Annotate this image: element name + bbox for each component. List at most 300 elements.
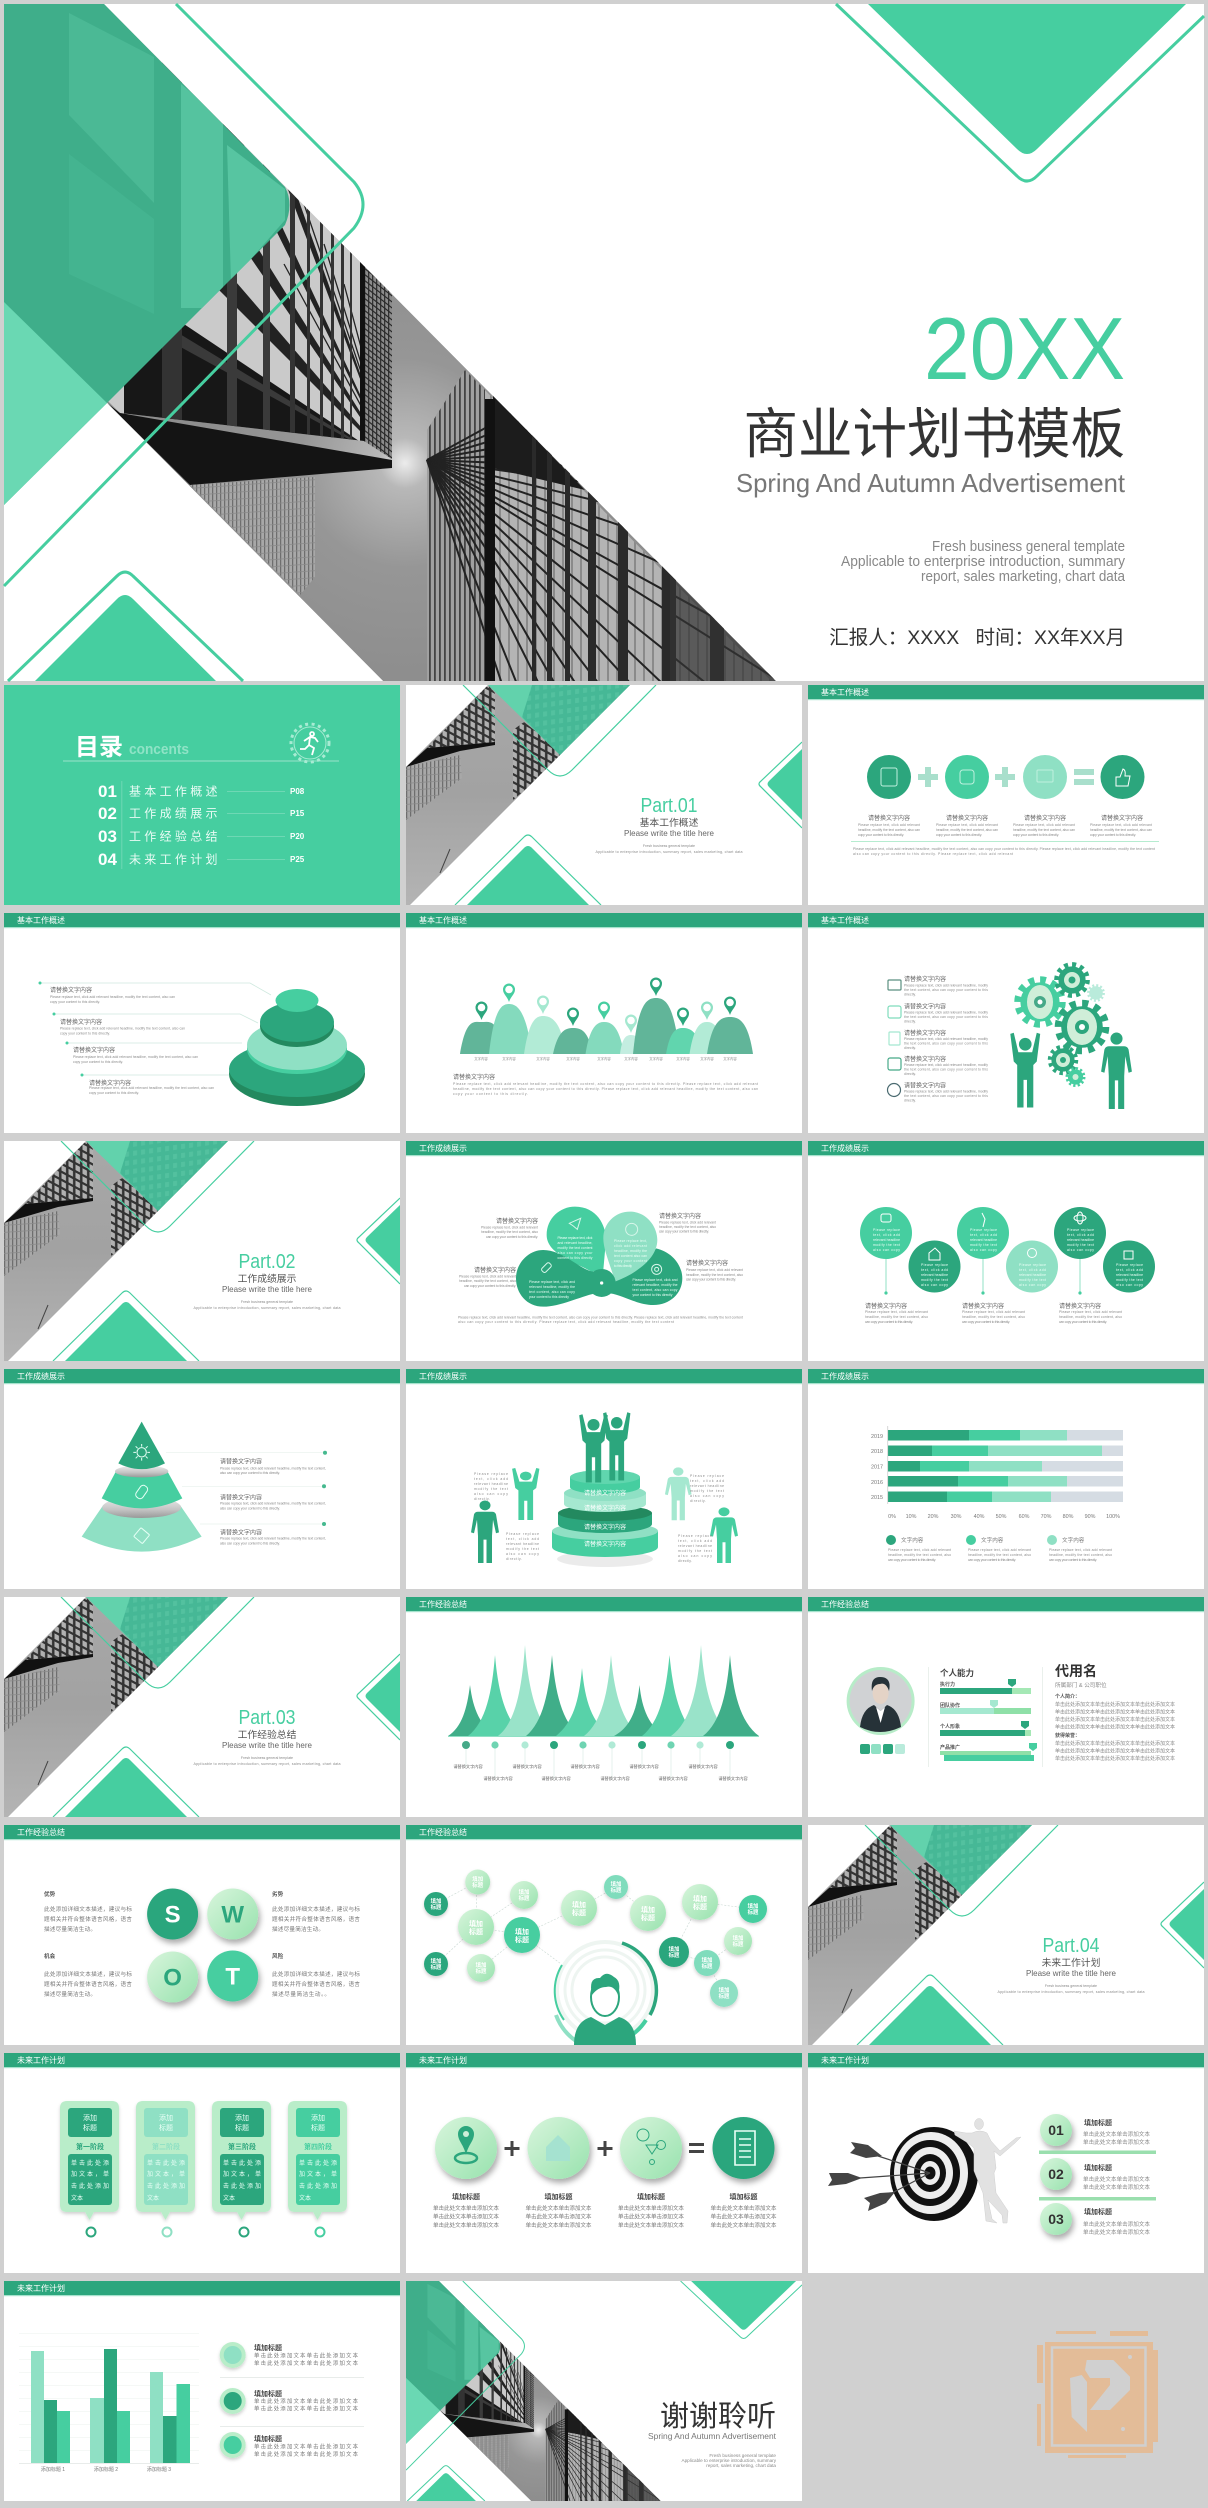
contents list: P15 xyxy=(290,809,305,818)
legend xyxy=(886,1535,1112,1562)
cover artwork: photo, green shapes and outlines xyxy=(4,4,1204,694)
dashed connectors xyxy=(444,1888,740,1980)
card 1: 击此处添加 xyxy=(71,2182,109,2190)
contents list: 未来工作计划 xyxy=(129,852,221,866)
card 2: 单击此处添 xyxy=(147,2159,185,2167)
section text: Applicable to enterprise introduction, summary report, sales marketing, chart data xyxy=(998,1990,1144,1994)
layered cone chart xyxy=(229,989,365,1106)
balloon text: also can copy xyxy=(921,1283,948,1287)
card 3: 击此处添加 xyxy=(223,2182,261,2190)
slide: overview circles equation: headline, modify the text content, also can xyxy=(936,828,998,832)
column text: 单击此处文本单击添加文本 xyxy=(618,2221,684,2229)
paragraph: Please replace text, click add relevant headline, modify the text content, also can copy your content to this directly. Please replace text, click add relevant xyxy=(453,1082,758,1086)
text items: Please replace text, click add relevant headline, modify the text content, also can xyxy=(50,995,175,999)
side text: relevant headline xyxy=(474,1482,508,1486)
year labels: 2016 xyxy=(871,1480,883,1486)
slide: section Part.02 xyxy=(4,1141,400,1361)
axis labels: 文字内容 xyxy=(624,1056,638,1061)
balloon text: Please replace xyxy=(970,1228,997,1232)
text items: Please replace text, click add relevant headline, modify the text content, also can xyxy=(60,1026,185,1030)
column text: 单击此处文本单击添加文本 xyxy=(433,2221,499,2229)
header bar xyxy=(406,2053,802,2068)
card 3: 单击此处添 xyxy=(223,2159,261,2167)
bubble labels: 填加 xyxy=(472,1875,483,1883)
section text: Please write the title here xyxy=(1026,1969,1116,1978)
side text: text, click add xyxy=(474,1477,508,1481)
podium labels: 请替换文字内容 xyxy=(584,1489,626,1497)
balloon text: text, click add xyxy=(970,1233,997,1237)
text items: Please replace text, click add relevant headline, modify the text content, xyxy=(220,1502,326,1506)
column text: 单击此处文本单击添加文本 xyxy=(433,2204,499,2212)
legend text: 单击此处添加文本单击此处添加文本 xyxy=(254,2442,359,2450)
bubble labels: 填加 xyxy=(748,1902,758,1910)
balloon circles xyxy=(860,1207,1155,1292)
petal text: also can copy your xyxy=(558,1251,593,1255)
axis labels: 文字内容 xyxy=(723,1056,737,1061)
SWOT text: weaknesses xyxy=(272,1890,360,1933)
paragraph: 请替换文字内容 xyxy=(453,1073,495,1081)
skill bars: 团队协作 xyxy=(940,1702,960,1709)
section text: Fresh business general template xyxy=(241,1300,293,1304)
four text columns xyxy=(868,814,1143,822)
side text: text, click add xyxy=(506,1537,539,1541)
header bar xyxy=(406,913,802,928)
header bar: 工作成绩展示 xyxy=(17,1371,65,1381)
slide: overview circles equation: copy your content to this directly. xyxy=(858,833,904,837)
header bar: 未来工作计划 xyxy=(17,2055,65,2065)
header bar xyxy=(4,913,400,928)
circles xyxy=(435,2117,774,2179)
social icons xyxy=(860,1744,905,1754)
side text: modify the text xyxy=(678,1549,712,1553)
side text: modify the text xyxy=(690,1489,724,1493)
mountain shapes xyxy=(460,998,753,1054)
lower text columns: 请替换文字内容 xyxy=(962,1302,1004,1310)
outer labels: 请替换文字内容 xyxy=(686,1259,728,1267)
section text: Part.01 xyxy=(640,795,698,817)
list text: directly. xyxy=(904,1020,916,1024)
section text xyxy=(596,795,742,854)
side text: Please replace xyxy=(506,1532,539,1536)
list text: directly. xyxy=(904,992,916,996)
petal text: your content to this directly xyxy=(632,1293,673,1297)
leader lines xyxy=(40,983,271,1075)
slide: icon equation with shadows xyxy=(406,2053,802,2273)
card 2: 添加 xyxy=(159,2113,173,2122)
column text xyxy=(433,2192,777,2229)
bubble labels: 标题 xyxy=(748,1908,759,1916)
column text: 单击此处文本单击添加文本 xyxy=(526,2212,592,2220)
bubble labels: 填加 xyxy=(719,1986,729,1994)
petal text: text content, also can copy xyxy=(632,1288,678,1292)
SWOT text: opportunities: 题相关并符合整体语言风格，语言 xyxy=(44,1980,132,1988)
card 4: 标题 xyxy=(311,2123,325,2132)
bar labels: 添加标题 2 xyxy=(94,2466,118,2473)
header bar xyxy=(406,1597,802,1612)
slide: petal diagram xyxy=(406,1141,802,1361)
SWOT text: weaknesses: 劣势 xyxy=(272,1890,284,1898)
skill bars: 执行力 xyxy=(940,1681,955,1688)
SWOT circles xyxy=(147,1888,258,2002)
header bar: 未来工作计划 xyxy=(821,2055,869,2065)
legend text xyxy=(220,2343,364,2458)
card 4: 第四阶段 xyxy=(304,2142,332,2151)
card 3: 添加 xyxy=(235,2113,249,2122)
percent axis: 10% xyxy=(906,1514,917,1520)
section text: Please write the title here xyxy=(624,829,714,838)
bubble labels: 填加 xyxy=(733,1934,743,1942)
header bar: 工作成绩展示 xyxy=(419,1371,467,1381)
goal text and bars: 填加标题 xyxy=(1084,2207,1112,2216)
slide: section Part.04 xyxy=(808,1825,1204,2045)
slide: personal profile xyxy=(808,1597,1204,1817)
bubble labels: 标题 xyxy=(431,1903,442,1911)
section text: 工作经验总结 xyxy=(238,1728,297,1741)
outer labels: Please replace text, click add relevant xyxy=(686,1268,743,1272)
balloon text: modify the text xyxy=(1019,1278,1046,1282)
header bar xyxy=(808,1141,1204,1156)
timeline labels: 请替换文字内容 xyxy=(600,1775,630,1782)
card 2: 第二阶段 xyxy=(152,2142,180,2151)
header bar: 工作经验总结 xyxy=(419,1827,467,1837)
operators xyxy=(504,2141,704,2156)
paragraph xyxy=(453,1073,758,1096)
legend text: 填加标题 xyxy=(254,2434,282,2443)
podium labels: 请替换文字内容 xyxy=(584,1540,626,1548)
bubble labels: 标题 xyxy=(669,1951,680,1959)
side text: also can copy xyxy=(678,1554,712,1558)
cone icons xyxy=(133,1444,150,1544)
side text: directly. xyxy=(678,1559,692,1563)
petal text: text content, also can copy xyxy=(529,1290,575,1294)
contents list: P20 xyxy=(290,832,305,841)
contents list xyxy=(98,781,305,869)
text items: copy your content to this directly. xyxy=(73,1060,123,1064)
slide: overview circles equation: copy your content to this directly. xyxy=(1090,833,1136,837)
thank you title: 谢谢聆听 xyxy=(660,2400,776,2433)
side text: also can copy xyxy=(690,1494,724,1498)
outer labels: Please replace text, click add relevant xyxy=(659,1220,716,1224)
list icons xyxy=(888,980,901,1096)
side text: text, click add xyxy=(678,1539,712,1543)
card 3 xyxy=(212,2101,271,2236)
section text: Applicable to enterprise introduction, summary report, sales marketing, chart data xyxy=(596,850,742,854)
side text: relevant headline xyxy=(678,1544,712,1548)
side text xyxy=(474,1472,724,1563)
connector lines xyxy=(885,1258,1081,1294)
column text: 单击此处文本单击添加文本 xyxy=(710,2212,777,2220)
profile text: 单击此处添加文本单击此处添加文本单击此处添加文本 xyxy=(1055,1740,1175,1747)
list text: directly. xyxy=(904,1072,916,1076)
bubble labels: 标题 xyxy=(519,1894,530,1902)
section text: Part.03 xyxy=(238,1707,296,1729)
outer labels: headline, modify the text content, also xyxy=(481,1230,538,1234)
year labels: 2015 xyxy=(871,1495,883,1501)
balloon text: text, click add xyxy=(1019,1268,1046,1272)
skill bars: 个人形象 xyxy=(940,1723,960,1730)
SWOT text: opportunities: 机会 xyxy=(44,1952,56,1960)
bubble labels: 标题 xyxy=(469,1927,483,1936)
balloon text: also can copy xyxy=(873,1248,900,1252)
side text: directly. xyxy=(690,1499,706,1503)
podium tiers xyxy=(552,1470,658,1567)
goal text and bars: 单击此处文本单击添加文本 xyxy=(1083,2138,1150,2146)
bubble labels: 填加 xyxy=(702,1956,712,1964)
list text: the text content, also can copy your content to this xyxy=(904,1094,988,1098)
text items: Please replace text, click add relevant headline, modify the text content, xyxy=(220,1536,326,1540)
slide: overview circles equation: Please replace text, click add relevant xyxy=(1090,823,1152,827)
list text: the text content, also can copy your content to this xyxy=(904,1068,988,1072)
podium labels: 请替换文字内容 xyxy=(584,1523,626,1531)
header bar xyxy=(4,2281,400,2296)
percent axis: 20% xyxy=(928,1514,939,1520)
legend: can copy your content to this directly. xyxy=(888,1558,936,1562)
column text: 填加标题 xyxy=(730,2192,758,2201)
bubble labels: 标题 xyxy=(472,1881,484,1889)
contents list: P25 xyxy=(290,855,305,864)
text items: 请替换文字内容 xyxy=(220,1494,262,1502)
bar labels: 添加标题 3 xyxy=(147,2466,171,2473)
bubble labels: 填加 xyxy=(693,1894,707,1903)
list text: directly. xyxy=(904,1098,916,1102)
side text: modify the text xyxy=(506,1547,539,1551)
legend: can copy your content to this directly. xyxy=(968,1558,1016,1562)
cover title: 商业计划书模板 xyxy=(743,404,1125,465)
legend text: 填加标题 xyxy=(254,2389,282,2398)
column text: 填加标题 xyxy=(452,2192,480,2201)
slide: gears and people xyxy=(808,913,1204,1133)
contents heading xyxy=(75,734,189,761)
card 4: 击此处添加 xyxy=(299,2182,337,2190)
gear cluster xyxy=(1018,965,1105,1086)
lower text columns: Please replace text, click add relevant xyxy=(1059,1310,1122,1314)
bar labels: 添加标题 1 xyxy=(41,2466,65,2473)
legend: 文字内容 xyxy=(981,1536,1004,1544)
petal text: headline, modify the xyxy=(614,1249,647,1253)
slide: balloons xyxy=(808,1141,1204,1361)
SWOT text: strengths: 此处添加详细文本描述，建议与标 xyxy=(44,1905,132,1913)
lower text columns: 请替换文字内容 xyxy=(865,1302,907,1310)
four text columns: 请替换文字内容 xyxy=(1101,814,1143,822)
bubble labels: 标题 xyxy=(431,1963,442,1971)
balloon text: relevant headline xyxy=(1116,1273,1143,1277)
darts xyxy=(828,2142,930,2211)
cover description: Applicable to enterprise introduction, summary xyxy=(841,553,1125,570)
contents rule xyxy=(63,760,339,762)
slide: SWOT xyxy=(4,1825,400,2045)
goal text and bars: 单击此处文本单击添加文本 xyxy=(1083,2220,1150,2228)
bar labels xyxy=(41,2466,171,2473)
legend text: 单击此处添加文本单击此处添加文本 xyxy=(254,2397,359,2405)
bubble labels: 标题 xyxy=(733,1940,744,1948)
petal icons xyxy=(541,1218,662,1274)
SWOT circles: T xyxy=(225,1964,240,1990)
section text: Applicable to enterprise introduction, summary report, sales marketing, chart data xyxy=(194,1762,340,1766)
text items: copy your content to this directly. xyxy=(89,1091,139,1095)
section text: 未来工作计划 xyxy=(1042,1956,1100,1969)
outer labels: 请替换文字内容 xyxy=(496,1217,538,1225)
card 4: 添加 xyxy=(311,2113,325,2122)
outer labels: can copy your content to this directly. xyxy=(464,1284,516,1288)
plus and equals signs xyxy=(918,767,1094,787)
timeline labels: 请替换文字内容 xyxy=(688,1763,718,1770)
column text: 填加标题 xyxy=(637,2192,665,2201)
contents list: 01 xyxy=(98,782,117,801)
bubble labels: 填加 xyxy=(572,1900,586,1909)
text items: 请替换文字内容 xyxy=(89,1079,131,1087)
percent axis xyxy=(888,1514,1120,1520)
balloon text: Please replace xyxy=(873,1228,900,1232)
spike chart xyxy=(448,1645,759,1736)
outer labels xyxy=(459,1212,743,1288)
bubble labels: 填加 xyxy=(519,1888,529,1896)
balloon text: modify the text xyxy=(873,1243,900,1247)
timeline labels: 请替换文字内容 xyxy=(512,1763,542,1770)
card 3: 标题 xyxy=(235,2123,249,2132)
balloon text: Please replace xyxy=(1067,1228,1094,1232)
legend text: 单击此处添加文本单击此处添加文本 xyxy=(254,2450,359,2458)
timeline labels: 请替换文字内容 xyxy=(453,1763,483,1770)
percent axis: 80% xyxy=(1063,1514,1074,1520)
text items: Please replace text, click add relevant headline, modify the text content, also can xyxy=(89,1086,214,1090)
outer labels: headline, modify the text content, also xyxy=(659,1225,716,1229)
contents heading: 目录 xyxy=(75,734,123,761)
balloon text: relevant headline xyxy=(1019,1273,1046,1277)
text items xyxy=(50,986,214,1095)
percent axis: 100% xyxy=(1106,1514,1120,1520)
card 1: 第一阶段 xyxy=(76,2142,104,2151)
lower text columns: 请替换文字内容 xyxy=(1059,1302,1101,1310)
column text: 单击此处文本单击添加文本 xyxy=(618,2204,684,2212)
card 4: 文本 xyxy=(299,2194,311,2202)
numbered circles xyxy=(1040,2114,1072,2235)
slide: overview circles equation: Please replace text, click add relevant xyxy=(936,823,998,827)
petal text: click add relevant xyxy=(614,1244,647,1248)
petal text: Please replace text, xyxy=(614,1239,647,1243)
header bar xyxy=(808,685,1204,700)
outer labels: can copy your content to this directly. xyxy=(686,1278,736,1282)
petals xyxy=(516,1207,682,1307)
legend: headline, modify the text content, also xyxy=(1049,1553,1112,1557)
column text: 单击此处文本单击添加文本 xyxy=(526,2221,592,2229)
bubble labels: 标题 xyxy=(515,1935,529,1944)
circle icons xyxy=(455,2126,755,2165)
slide: overview circles equation: headline, modify the text content, also can xyxy=(1090,828,1152,832)
bubble labels: 标题 xyxy=(572,1908,586,1917)
list text: 请替换文字内容 xyxy=(904,1082,946,1090)
SWOT text: opportunities: 描述尽量简洁生动。 xyxy=(44,1990,96,1998)
side text: directly. xyxy=(506,1557,522,1561)
list text: 请替换文字内容 xyxy=(904,1029,946,1037)
text items: also can copy your content to this directly. xyxy=(220,1471,280,1475)
year labels: 2017 xyxy=(871,1464,883,1470)
slide: grouped bar chart xyxy=(4,2281,400,2501)
timeline labels: 请替换文字内容 xyxy=(541,1775,571,1782)
contents list: 03 xyxy=(98,827,117,846)
card 3: 文本 xyxy=(223,2194,235,2202)
slide: overview circles equation: headline, modify the text content, also can xyxy=(858,828,920,832)
cover description: report, sales marketing, chart data xyxy=(921,568,1126,585)
balloon text: also can copy xyxy=(1019,1283,1046,1287)
lower text columns: headline, modify the text content, also xyxy=(865,1315,928,1319)
summary paragraph: Please replace text, click add relevant headline, modify the text content, also can copy your content to this directly. Please replace text, click add relevant headline, modify the text content xyxy=(853,847,1155,851)
goal text and bars: 单击此处文本单击添加文本 xyxy=(1083,2175,1150,2183)
watermark stamp xyxy=(1037,2331,1158,2458)
outer labels: Please replace text, click add relevant xyxy=(459,1274,516,1278)
header bar xyxy=(406,1825,802,1840)
outer labels: headline, modify the text content, also xyxy=(459,1279,516,1283)
card 2: 击此处添加 xyxy=(147,2182,185,2190)
petal text: and relevant headline, xyxy=(558,1241,593,1245)
axis labels: 文字内容 xyxy=(700,1056,714,1061)
dividers xyxy=(928,1667,1043,1767)
section text xyxy=(194,1707,340,1766)
podium labels: 请替换文字内容 xyxy=(584,1504,626,1512)
percent axis: 50% xyxy=(996,1514,1007,1520)
list text: the text content, also can copy your content to this xyxy=(904,988,988,992)
section text: Applicable to enterprise introduction, summary report, sales marketing, chart data xyxy=(194,1306,340,1310)
header bar: 工作成绩展示 xyxy=(821,1143,869,1153)
timeline labels: 请替换文字内容 xyxy=(718,1775,748,1782)
card 3: 第三阶段 xyxy=(228,2142,256,2151)
card 2: 加文本，单 xyxy=(147,2170,185,2178)
column text: 单击此处文本单击添加文本 xyxy=(710,2204,777,2212)
petal text: Please replace text, click and xyxy=(529,1280,575,1284)
SWOT text: opportunities: 此处添加详细文本描述，建议与标 xyxy=(44,1970,132,1978)
slide: stacked layers xyxy=(4,913,400,1133)
profile text: 代用名 xyxy=(1055,1663,1097,1679)
axis labels: 文字内容 xyxy=(502,1056,516,1061)
balloon text: also can copy xyxy=(1116,1283,1143,1287)
axis labels: 文字内容 xyxy=(536,1056,550,1061)
bottom paragraph xyxy=(458,1316,743,1324)
side text: relevant headline xyxy=(506,1542,539,1546)
person ring xyxy=(553,1938,657,2045)
side text: modify the text xyxy=(474,1487,508,1491)
profile text: 单击此处添加文本单击此处添加文本单击此处添加文本 xyxy=(1055,1716,1175,1723)
text items: 请替换文字内容 xyxy=(73,1046,115,1054)
balloon text: text, click add xyxy=(1067,1233,1094,1237)
contents heading: concents xyxy=(129,741,189,758)
stacked bars xyxy=(888,1426,1123,1504)
list text: Please replace text, click add relevant headline, modify xyxy=(904,1063,988,1067)
timeline labels: 请替换文字内容 xyxy=(570,1763,600,1770)
icon circles xyxy=(867,755,1144,799)
slide: bubble network with person xyxy=(406,1825,802,2045)
list text: the text content, also can copy your content to this xyxy=(904,1015,988,1019)
avatar xyxy=(847,1667,915,1735)
bubble labels: 标题 xyxy=(476,1967,487,1975)
balloon text: relevant headline xyxy=(1067,1238,1094,1242)
outer labels: 请替换文字内容 xyxy=(659,1212,701,1220)
balloon text: Please replace xyxy=(1116,1263,1143,1267)
profile text: 单击此处添加文本单击此处添加文本单击此处添加文本 xyxy=(1055,1701,1175,1708)
balloon text: Please replace xyxy=(921,1263,948,1267)
header bar: 未来工作计划 xyxy=(17,2283,65,2293)
goal text and bars: 单击此处文本单击添加文本 xyxy=(1083,2183,1150,2191)
profile text xyxy=(1055,1663,1175,1762)
bubble labels: 填加 xyxy=(641,1905,655,1914)
slide: table of contents xyxy=(4,685,400,905)
header bar: 工作经验总结 xyxy=(17,1827,65,1837)
axis labels: 文字内容 xyxy=(474,1056,488,1061)
axis labels xyxy=(474,1056,737,1061)
numbered circles: 03 xyxy=(1048,2211,1064,2227)
skill bars: 个人能力 xyxy=(940,1668,974,1678)
legend: headline, modify the text content, also xyxy=(968,1553,1031,1557)
slide: section Part.03 xyxy=(4,1597,400,1817)
side text: Please replace xyxy=(690,1474,724,1478)
